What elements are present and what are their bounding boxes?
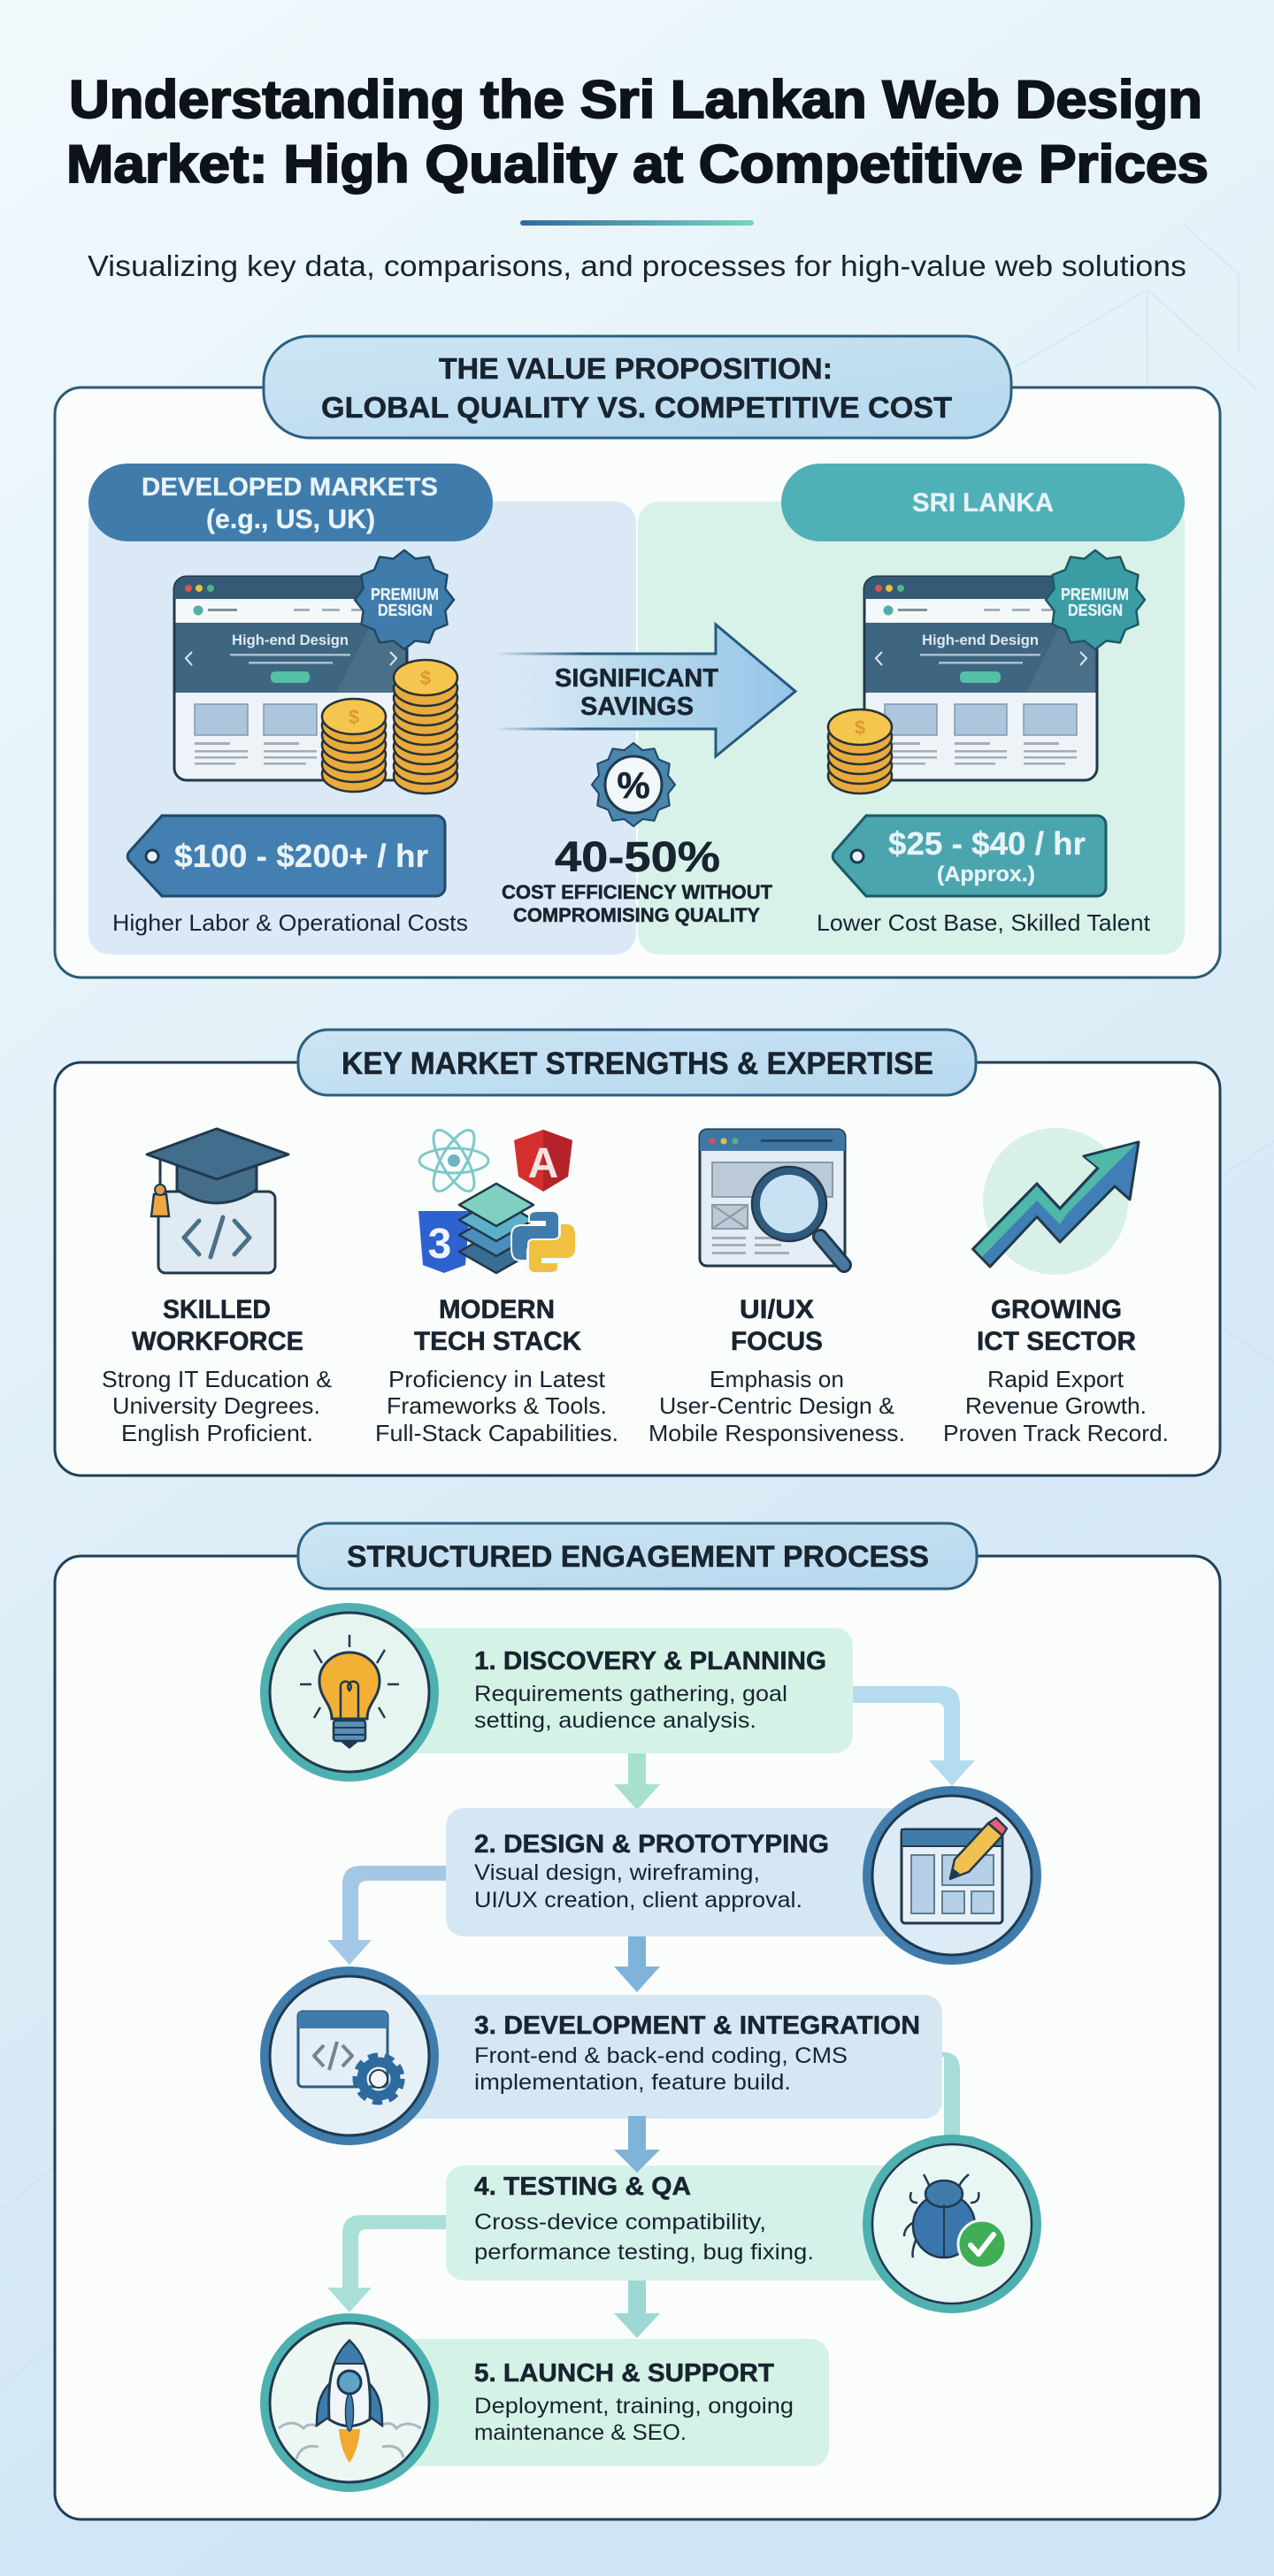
icon: tech stack logos: A [528,1140,558,1187]
icon: tech stack logos [418,1124,576,1273]
icon: percent badge: % [617,764,650,806]
badge: premium design (sri lanka) [1046,550,1145,649]
statistic: 40-50% cost efficiency: 40-50% [555,834,720,881]
label: sri lanka [781,464,1185,541]
arrow: significant savings: SIGNIFICANT [555,664,718,693]
step 1: discovery and planning: Requirements gathering, goal [474,1682,787,1706]
text: ui/ux focus: Mobile Responsiveness. [649,1420,905,1446]
text: modern tech stack: TECH STACK [414,1327,581,1356]
icon: bug and check [867,2139,1037,2309]
caption: developed markets costs: Higher Labor & Operational Costs [112,909,468,936]
text: skilled workforce [102,1295,332,1446]
caption: sri lanka costs: Lower Cost Base, Skilled Talent [817,909,1151,936]
text: growing ict sector: Rapid Export [987,1366,1124,1392]
icon: tall coin stack: $ [420,667,431,689]
icon: tech stack logos: 3 [428,1221,451,1268]
heading: value proposition: THE VALUE PROPOSITION: [439,352,833,385]
step 1: discovery and planning: setting, audience analysis. [474,1708,756,1733]
step 5: launch and support: maintenance & SEO. [474,2420,687,2445]
illustration: sri lanka website: High-end Design [922,632,1039,648]
arrow: step 1 to design icon [849,1686,975,1786]
heading: structured engagement process: STRUCTURED ENGAGEMENT PROCESS [347,1540,929,1574]
arrow: step 1 to step 2 [614,1752,660,1810]
text: ui/ux focus: User-Centric Design & [659,1392,894,1419]
badge: premium design (sri lanka): DESIGN [1068,602,1123,619]
label: sri lanka: SRI LANKA [912,488,1054,518]
arrow: step 2 to development icon [327,1866,448,1965]
label: developed markets: (e.g., US, UK) [206,503,375,534]
label: developed markets: DEVELOPED MARKETS [142,473,438,502]
text: ui/ux focus: Emphasis on [710,1366,844,1392]
step 2: design and prototyping: 2. DESIGN & PROTOTYPING [474,1830,829,1859]
illustration: developed markets website [174,577,407,780]
price tag: sri lanka [833,816,1106,896]
arrow: step 2 to step 3 [614,1935,660,1992]
text: skilled workforce: English Proficient. [121,1420,313,1446]
step 3: development and integration: Front-end & back-end coding, CMS [474,2043,848,2068]
step 2: design and prototyping: UI/UX creation, client approval. [474,1888,802,1913]
arrow: significant savings: SAVINGS [580,693,694,721]
panel: value proposition [55,336,1220,978]
step 4: testing and qa [446,2139,1037,2309]
step 4: testing and qa: performance testing, bug fixing. [474,2240,814,2265]
step 1: discovery and planning: 1. DISCOVERY & PLANNING [474,1647,826,1675]
title [66,70,1209,194]
icon: small coin stack: $ [855,717,865,739]
price tag: developed markets: $100 - $200+ / hr [174,838,428,874]
subtitle: Visualizing key data, comparisons, and processes for high-value web solutions [88,249,1186,282]
heading: structured engagement process [298,1523,977,1589]
step 5: launch and support: Deployment, training, ongoing [474,2394,794,2419]
step 5: launch and support: 5. LAUNCH & SUPPORT [474,2359,774,2388]
text: skilled workforce: SKILLED [163,1295,271,1324]
step 4: testing and qa: 4. TESTING & QA [474,2173,691,2201]
illustration: developed markets website: High-end Design [232,632,349,648]
step 3: development and integration: implementation, feature build. [474,2070,791,2095]
icon: light bulb [265,1607,434,1777]
arrow: step 3 to bug icon [929,2052,975,2158]
text: growing ict sector: GROWING [991,1295,1122,1324]
icon: small coin stack [828,709,892,794]
text: skilled workforce: Strong IT Education & [102,1366,332,1392]
text: modern tech stack: MODERN [439,1295,555,1324]
icon: growth arrow [973,1128,1139,1275]
panel: developed markets background [88,502,636,954]
step 2: design and prototyping [446,1790,1037,1960]
statistic: 40-50% cost efficiency [502,834,773,926]
arrow: significant savings [494,625,795,756]
statistic: 40-50% cost efficiency: COMPROMISING QUALITY [513,904,760,926]
heading: value proposition [264,336,1011,438]
illustration: sri lanka website [864,577,1097,780]
arrow: step 4 to step 5 [614,2279,660,2338]
icon: graduation cap and code [147,1129,288,1273]
icon: tall coin stack [394,660,457,794]
text: ui/ux focus [649,1295,905,1446]
step 4: testing and qa: Cross-device compatibility, [474,2210,766,2235]
badge: premium design (developed markets): DESIGN [378,602,433,619]
icon: wireframe and pencil [867,1790,1037,1960]
price tag: developed markets [127,816,445,896]
step 3: development and integration: 3. DEVELOPMENT & INTEGRATION [474,2012,920,2040]
text: modern tech stack: Frameworks & Tools. [387,1392,607,1419]
panel: key market strengths [55,1030,1220,1476]
heading: key market strengths: KEY MARKET STRENGTHS & EXPERTISE [342,1046,933,1081]
text: ui/ux focus: UI/UX [740,1295,814,1324]
icon: ui/ux magnifier [700,1130,845,1266]
heading: key market strengths [298,1030,976,1095]
icon: rocket [265,2318,434,2488]
text: skilled workforce: University Degrees. [112,1392,320,1419]
price tag: sri lanka: $25 - $40 / hr [888,825,1086,862]
text: growing ict sector [943,1295,1169,1446]
text: modern tech stack [375,1295,618,1446]
step 5: launch and support [265,2318,829,2488]
text: ui/ux focus: FOCUS [731,1327,823,1356]
badge: premium design (sri lanka): PREMIUM [1061,586,1129,603]
title: Understanding the Sri Lankan Web Design [69,70,1202,129]
price tag: sri lanka: (Approx.) [937,862,1035,886]
text: growing ict sector: Revenue Growth. [965,1392,1147,1419]
icon: code window and gear [265,1971,434,2141]
icon: percent badge [592,743,675,826]
step 2: design and prototyping: Visual design, wireframing, [474,1860,760,1885]
title: Market: High Quality at Competitive Prices [66,134,1209,194]
arrow: step 4 to rocket icon [327,2215,448,2312]
text: growing ict sector: ICT SECTOR [977,1327,1136,1356]
arrow: step 3 to step 4 [614,2116,660,2173]
text: skilled workforce: WORKFORCE [132,1327,303,1356]
panel: structured engagement process [55,1523,1220,2519]
badge: premium design (developed markets): PREMIUM [371,586,439,603]
icon: short coin stack [322,699,386,792]
statistic: 40-50% cost efficiency: COST EFFICIENCY WITHOUT [502,881,773,903]
badge: premium design (developed markets) [355,550,454,649]
text: modern tech stack: Full-Stack Capabilities. [375,1420,618,1446]
label: developed markets [88,464,493,541]
panel: sri lanka background [638,502,1185,954]
step 1: discovery and planning [265,1607,853,1777]
text: modern tech stack: Proficiency in Latest [388,1366,606,1392]
text: growing ict sector: Proven Track Record. [943,1420,1169,1446]
heading: value proposition: GLOBAL QUALITY VS. COMPETITIVE COST [321,391,952,424]
icon: short coin stack: $ [349,706,359,728]
step 3: development and integration [265,1971,942,2141]
